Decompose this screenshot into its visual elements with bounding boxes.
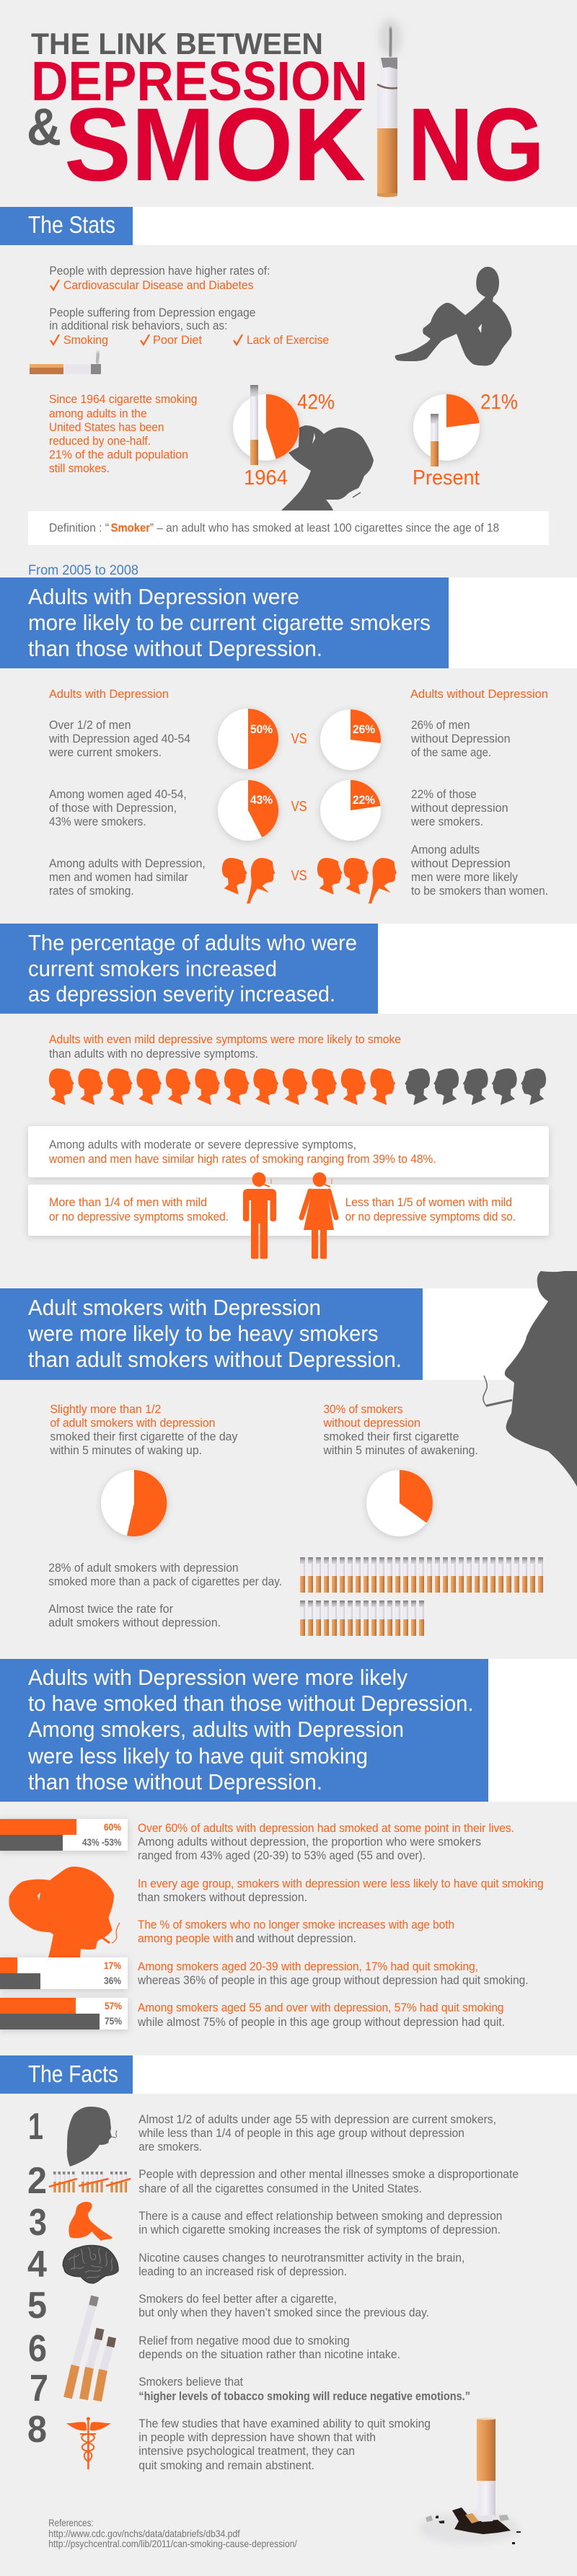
right column: non-depression smokers: without depression: [323, 1416, 420, 1430]
versus: VS: [291, 731, 307, 747]
icons: man and woman heads: [222, 858, 275, 903]
text: since 1964: [49, 392, 198, 475]
icon: caduceus: [66, 2417, 111, 2469]
panel: moderate or severe symptoms: [28, 1126, 549, 1177]
versus: VS: [291, 868, 307, 884]
row: women comparison: [49, 780, 508, 841]
right column: non-depression smokers: 30% of smokers: [323, 1402, 402, 1416]
text: risk behaviors: Smoking: [63, 333, 108, 347]
text: over 60 percent: Among adults without depression, the proportion who were smokers: [138, 1835, 481, 1849]
pie 26 percent: [320, 709, 381, 770]
text right: were smokers.: [410, 815, 483, 828]
text: over 60 percent: [138, 1821, 514, 1862]
fact 1: [28, 2106, 496, 2166]
pie 26 percent: 26%: [353, 722, 375, 736]
bar chart: age 55 and over: [0, 1998, 128, 2030]
check mark: [141, 335, 149, 345]
fact 2: People with depression and other mental illnesses smoke a disproportionate: [138, 2167, 519, 2181]
panel: mild symptoms by gender: Less than 1/5 of women with mild: [345, 1195, 512, 1209]
pictogram: cigarettes half rate: [300, 1601, 424, 1636]
section header: heavy smokers: than adult smokers without Depression.: [28, 1347, 402, 1372]
right column: non-depression smokers: within 5 minutes of awakening.: [323, 1443, 478, 1457]
bar chart: age 20-39: [0, 1957, 128, 1989]
fact 4: [27, 2244, 464, 2285]
fact 3: in which cigarette smoking increases the risk of symptoms of depression.: [138, 2223, 501, 2236]
fact 5: but only when they haven’t smoked since the previous day.: [138, 2306, 429, 2319]
bar chart: ever smoked: [0, 1819, 128, 1851]
check mark: [234, 335, 242, 345]
text right: [410, 787, 508, 828]
column headings: [49, 687, 548, 701]
column headings: Adults without Depression: [410, 687, 548, 701]
section header: the facts: [0, 2055, 577, 2094]
title letters ng: NG: [408, 87, 545, 203]
left column: depression smokers: Slightly more than 1/2: [50, 1402, 161, 1416]
text: since 1964: Since 1964 cigarette smoking: [49, 392, 198, 406]
text: higher rates: People with depression have higher rates of:: [49, 264, 270, 278]
pictogram: row of heads: [49, 1068, 546, 1105]
ampersand: &: [27, 99, 61, 156]
bar chart: age 20-39: 36%: [104, 1975, 121, 1986]
definition box: [28, 511, 549, 545]
section header: severity: as depression severity increased.: [28, 981, 335, 1006]
icon: orange woman head: [9, 1867, 120, 1957]
text: increases with age: among people with: [138, 1931, 234, 1945]
icon: three burning cigarettes: [68, 2296, 113, 2401]
text: mild symptoms: [49, 1032, 401, 1061]
pie: slightly more than half: [101, 1470, 167, 1536]
section header: quitting: were less likely to have quit smoking: [27, 1743, 368, 1769]
bar chart: age 55 and over: 75%: [105, 2015, 122, 2027]
text: since 1964: still smokes.: [49, 461, 110, 475]
text: risk behaviors: Poor Diet: [153, 333, 202, 347]
fact 3: There is a cause and effect relationship between smoking and depression: [138, 2209, 502, 2223]
label 1964: 1964: [244, 466, 288, 490]
icon: horizontal cigarette: [30, 352, 101, 374]
text: increases with age: and without depression.: [235, 1931, 356, 1945]
cigarette: [108, 2130, 117, 2138]
text: pack per day: Almost twice the rate for: [48, 1602, 173, 1616]
section header: quitting: Adults with Depression were more likely: [28, 1665, 408, 1690]
cigarette: [431, 414, 439, 466]
section header: quitting: Among smokers, adults with Depression: [28, 1717, 404, 1742]
text: aged 55 and over: Among smokers aged 55 and over with depression, 57% had quit smoking: [138, 2001, 503, 2014]
icons: two men and one woman heads: [317, 858, 397, 903]
text: mild symptoms: Adults with even mild depressive symptoms were more likely to smoke: [49, 1032, 401, 1046]
text: risk behaviors: in additional risk behaviors, such as:: [49, 319, 227, 332]
text left: 43% were smokers.: [49, 815, 146, 828]
pie 50 percent: [218, 709, 278, 769]
panel: mild symptoms by gender: or no depressive symptoms smoked.: [49, 1210, 229, 1223]
fact 3: [29, 2202, 502, 2244]
date label: From 2005 to 2008: [28, 563, 138, 578]
icon: crossed-out cigarettes: [49, 2172, 131, 2192]
icon: sitting person silhouette: [395, 267, 511, 366]
pie 22 percent: [320, 780, 381, 841]
icon: orange sitting person: [69, 2202, 113, 2241]
definition box: Definition : “: [49, 521, 109, 535]
text: aged 55 and over: while almost 75% of people in this age group without depression had quit.: [137, 2015, 505, 2029]
section header: heavy smokers: were more likely to be heavy smokers: [27, 1321, 379, 1346]
text: pack per day: [48, 1561, 282, 1629]
value 21 percent: 21%: [480, 391, 518, 414]
fact 5: Smokers do feel better after a cigarette,: [138, 2292, 337, 2306]
text: since 1964: 21% of the adult population: [49, 448, 188, 461]
pie 22 percent: 22%: [353, 793, 375, 807]
text: higher rates: [49, 264, 270, 292]
section header: current smokers: than those without Depression.: [28, 636, 322, 661]
text: pack per day: 28% of adult smokers with depression: [48, 1561, 239, 1575]
row: gender comparison: [49, 843, 548, 903]
references: http://psychcentral.com/lib/2011/can-smoking-cause-depression/: [48, 2538, 297, 2549]
text right: [410, 718, 511, 759]
fact 6: [28, 2328, 400, 2370]
fact 8: The few studies that have examined ability to quit smoking: [138, 2417, 431, 2430]
cigarette in mouth: [353, 492, 361, 497]
title line: smoking: SMOK: [64, 87, 366, 203]
smoke: [112, 1923, 120, 1943]
text right: without Depression: [410, 857, 511, 870]
row: men comparison: [48, 709, 511, 770]
text: since 1964: reduced by one-half.: [49, 434, 151, 448]
value 42 percent: 42%: [297, 391, 335, 414]
text left: with Depression aged 40-54: [48, 732, 190, 745]
text: higher rates: Cardiovascular Disease and Diabetes: [63, 278, 254, 292]
fact 5: [27, 2285, 429, 2327]
wedge 21 percent: [446, 394, 480, 428]
pie 43 percent: [218, 780, 278, 841]
icon: man smoking: [243, 1172, 276, 1259]
fact 8: 8: [27, 2409, 47, 2451]
fact 8: quit smoking and remain abstinent.: [138, 2458, 314, 2472]
fact 1: Almost 1/2 of adults under age 55 with depression are current smokers,: [138, 2112, 496, 2126]
text: aged 20-39: Among smokers aged 20-39 with depression, 17% had quit smoking,: [138, 1960, 478, 1973]
fact 7: “higher levels of tobacco smoking will reduce negative emotions.”: [138, 2389, 470, 2403]
smoke: [483, 1376, 487, 1405]
fact 8: [27, 2409, 431, 2472]
panel: mild symptoms by gender: [28, 1185, 549, 1236]
icon: stubbed-out cigarette: [418, 2418, 521, 2544]
fact 4: Nicotine causes changes to neurotransmitter activity in the brain,: [138, 2251, 464, 2265]
cigarette: [250, 385, 258, 465]
pie: 30 percent: [366, 1470, 433, 1536]
text right: 26% of men: [411, 718, 470, 732]
cigarette: [102, 1937, 110, 1943]
fact 6: depends on the situation rather than nicotine intake.: [138, 2347, 400, 2361]
icon: long-haired profile: [67, 2107, 112, 2166]
fact 6: 6: [28, 2328, 47, 2370]
text: pack per day: adult smokers without depression.: [48, 1616, 221, 1629]
bar chart: age 20-39: 17%: [104, 1960, 121, 1971]
section header: quitting: [0, 1659, 577, 1802]
panel: mild symptoms by gender: More than 1/4 of men with mild: [49, 1195, 207, 1209]
text: increases with age: [138, 1918, 454, 1945]
text left: rates of smoking.: [49, 884, 134, 898]
fact 4: leading to an increased risk of depression.: [138, 2265, 347, 2278]
fact 2: 2: [27, 2160, 47, 2202]
right column: non-depression smokers: smoked their first cigarette: [323, 1430, 459, 1443]
references: [48, 2517, 297, 2549]
icon: woman smoking: [301, 1172, 336, 1259]
text left: men and women had similar: [49, 870, 188, 884]
right column: non-depression smokers: [323, 1402, 478, 1457]
panel: moderate or severe symptoms: women and men have similar high rates of smoking ranging from 39% to 48%.: [48, 1152, 436, 1166]
text: pack per day: smoked more than a pack of cigarettes per day.: [48, 1575, 282, 1588]
text left: of those with Depression,: [49, 801, 177, 815]
versus: VS: [291, 799, 307, 815]
section header: the stats: [0, 207, 577, 245]
section header: severity: current smokers increased: [28, 956, 277, 981]
text: risk behaviors: Lack of Exercise: [247, 333, 329, 347]
text: over 60 percent: ranged from 43% aged (20-39) to 53% aged (55 and over).: [138, 1849, 426, 1862]
text: every age group: than smokers without depression.: [138, 1890, 307, 1904]
text left: Among women aged 40-54,: [49, 787, 187, 801]
fact 1: while less than 1/4 of people in this age group without depression: [138, 2126, 464, 2140]
left column: depression smokers: [49, 1402, 238, 1457]
fact 7: 7: [30, 2368, 48, 2409]
bar chart: ever smoked: 60%: [104, 1821, 121, 1833]
pie 43 percent: 43%: [250, 793, 273, 807]
text left: Among adults with Depression,: [49, 857, 206, 870]
fact 5: 5: [27, 2285, 47, 2327]
text: since 1964: among adults in the: [49, 407, 147, 420]
text right: without Depression: [410, 732, 511, 745]
text: aged 55 and over: [137, 2001, 505, 2029]
panel: moderate or severe symptoms: Among adults with moderate or severe depressive symptoms,: [49, 1138, 356, 1151]
pie: present: [413, 391, 518, 490]
section header: current smokers: more likely to be current cigarette smokers: [28, 610, 431, 635]
panel: mild symptoms by gender: or no depressive symptoms did so.: [345, 1210, 516, 1223]
fact 6: Relief from negative mood due to smoking: [138, 2334, 350, 2347]
pie 50 percent: 50%: [250, 722, 273, 736]
fact 4: 4: [27, 2244, 47, 2285]
fact 2: share of all the cigarettes consumed in the United States.: [138, 2182, 422, 2195]
text left: [48, 718, 190, 759]
section header: the facts: The Facts: [28, 2061, 118, 2087]
references: References:: [48, 2517, 94, 2528]
fact 1: are smokers.: [138, 2140, 202, 2154]
section header: current smokers: [0, 577, 577, 668]
text: increases with age: The % of smokers who no longer smoke increases with age both: [138, 1918, 454, 1931]
references: http://www.cdc.gov/nchs/data/databriefs/db34.pdf: [48, 2528, 240, 2539]
text left: Over 1/2 of men: [49, 718, 131, 732]
icon: woman head silhouette: [281, 425, 374, 510]
text left: [49, 857, 206, 898]
section header: the stats: The Stats: [28, 211, 115, 238]
section header: quitting: to have smoked than those without Depression.: [28, 1691, 474, 1716]
icon: smoking man profile: [483, 1271, 577, 1487]
text right: without depression: [410, 801, 508, 815]
text: every age group: In every age group, smokers with depression were less likely to have quit smoking: [138, 1877, 544, 1890]
check mark: [50, 335, 59, 345]
fact 7: [30, 2368, 470, 2409]
section header: severity: The percentage of adults who were: [28, 930, 357, 955]
left column: depression smokers: smoked their first cigarette of the day: [50, 1430, 238, 1443]
fact 1: 1: [28, 2106, 43, 2148]
title line: the link between: THE LINK BETWEEN: [31, 27, 323, 61]
bar chart: ever smoked: 43% -53%: [82, 1836, 122, 1848]
text right: [410, 843, 548, 898]
text right: to be smokers than women.: [411, 884, 548, 898]
fact 8: in people with depression have shown that with: [138, 2430, 376, 2444]
text: risk behaviors: [49, 306, 329, 347]
text: over 60 percent: Over 60% of adults with depression had smoked at some point in their lives.: [138, 1821, 514, 1835]
fact 2: [27, 2160, 519, 2202]
text right: Among adults: [411, 843, 480, 857]
definition box: ” – an adult who has smoked at least 100 cigarettes since the age of 18: [150, 521, 499, 535]
check mark: [50, 280, 59, 290]
term: smoker: Smoker: [111, 521, 150, 535]
cigarette: [486, 1400, 512, 1406]
text: every age group: [138, 1877, 544, 1904]
orange heads: [49, 1068, 395, 1105]
fact 8: intensive psychological treatment, they can: [138, 2444, 355, 2458]
text right: men were more likely: [411, 870, 518, 884]
title line: depression: DEPRESSION: [31, 50, 368, 112]
left column: depression smokers: of adult smokers with depression: [50, 1416, 215, 1430]
text right: of the same age.: [411, 745, 491, 759]
text: since 1964: United States has been: [49, 420, 164, 434]
title: I: [381, 87, 394, 203]
text left: were current smokers.: [48, 745, 162, 759]
text: risk behaviors: People suffering from Depression engage: [49, 306, 255, 319]
title: [27, 27, 545, 203]
text right: 22% of those: [411, 787, 477, 801]
fact 7: Smokers believe that: [138, 2375, 243, 2389]
section header: current smokers: Adults with Depression were: [28, 584, 299, 609]
text: mild symptoms: than adults with no depressive symptoms.: [49, 1047, 258, 1061]
grey heads: [405, 1068, 546, 1105]
wedge 42 percent: [266, 394, 299, 459]
fact 3: 3: [29, 2202, 47, 2244]
text: aged 20-39: whereas 36% of people in this age group without depression had quit smoking.: [137, 1973, 529, 1987]
bar chart: age 55 and over: 57%: [105, 2000, 122, 2011]
column headings: Adults with Depression: [49, 687, 169, 701]
icon: title cigarette with smoke: [377, 19, 402, 198]
left column: depression smokers: within 5 minutes of waking up.: [49, 1443, 202, 1457]
pictogram: cigarettes 28 percent: [300, 1557, 543, 1593]
section header: heavy smokers: [0, 1288, 577, 1380]
section header: severity: [0, 924, 577, 1014]
section header: quitting: than those without Depression.: [28, 1769, 322, 1794]
section header: heavy smokers: Adult smokers with Depression: [28, 1295, 321, 1320]
pie: 1964: [233, 385, 335, 490]
hair notch: [38, 1893, 40, 1900]
label present: Present: [413, 466, 480, 490]
text: aged 20-39: [137, 1960, 529, 1987]
text left: [49, 787, 187, 828]
icon: brain: [63, 2245, 118, 2283]
